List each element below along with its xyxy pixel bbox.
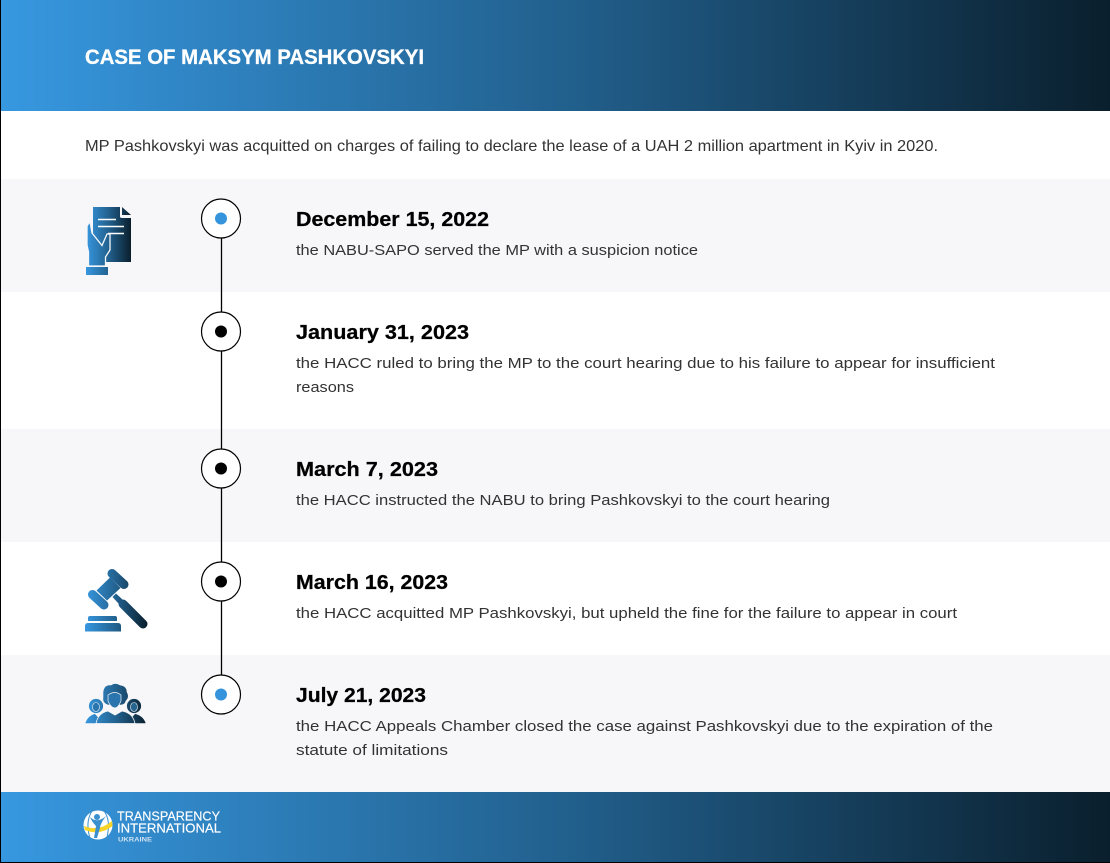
timeline nodes	[202, 199, 240, 714]
event: December 15, 2022: December 15, 2022	[296, 209, 489, 231]
event: January 31, 2023	[296, 322, 996, 396]
row backgrounds	[0, 179, 1110, 792]
logo: Transparency International Ukraine: INTERNATIONAL	[117, 822, 221, 836]
event: July 21, 2023: statute of limitations	[296, 742, 448, 759]
header banner	[0, 0, 1110, 111]
icon: hand holding document	[86, 207, 131, 275]
icon: group of judges	[85, 684, 146, 724]
event: July 21, 2023	[296, 685, 993, 759]
footer banner	[0, 792, 1110, 862]
event: July 21, 2023: the HACC Appeals Chamber closed the case against Pashkovskyi due to the expiration of the	[296, 718, 993, 735]
event: March 7, 2023	[296, 459, 830, 509]
intro text: MP Pashkovskyi was acquitted on charges of failing to declare the lease of a UAH 2 million apartment in Kyiv in 2020.	[85, 138, 938, 155]
logo: Transparency International Ukraine: UKRAINE	[118, 836, 153, 844]
node dots	[215, 212, 227, 700]
event: March 7, 2023: the HACC instructed the NABU to bring Pashkovskyi to the court hearing	[296, 492, 830, 509]
event: January 31, 2023: reasons	[296, 379, 354, 396]
logo: Transparency International Ukraine	[84, 810, 221, 844]
event: March 16, 2023: the HACC acquitted MP Pashkovskyi, but upheld the fine for the failure to appear in court	[296, 605, 958, 622]
event: January 31, 2023: the HACC ruled to bring the MP to the court hearing due to his failure to appear for insufficient	[296, 355, 996, 372]
event: March 7, 2023: March 7, 2023	[296, 459, 438, 481]
logo: Transparency International Ukraine: TRANSPARENCY	[117, 810, 221, 824]
title: CASE OF MAKSYM PASHKOVSKYI	[85, 46, 424, 69]
event: March 16, 2023: March 16, 2023	[296, 572, 448, 594]
event: January 31, 2023: January 31, 2023	[296, 322, 469, 344]
event: March 16, 2023	[296, 572, 958, 622]
icon: gavel	[85, 574, 143, 632]
event: December 15, 2022: the NABU-SAPO served the MP with a suspicion notice	[296, 242, 698, 259]
event: July 21, 2023: July 21, 2023	[296, 685, 426, 707]
timeline line	[220, 218, 222, 695]
event: December 15, 2022	[296, 209, 698, 259]
